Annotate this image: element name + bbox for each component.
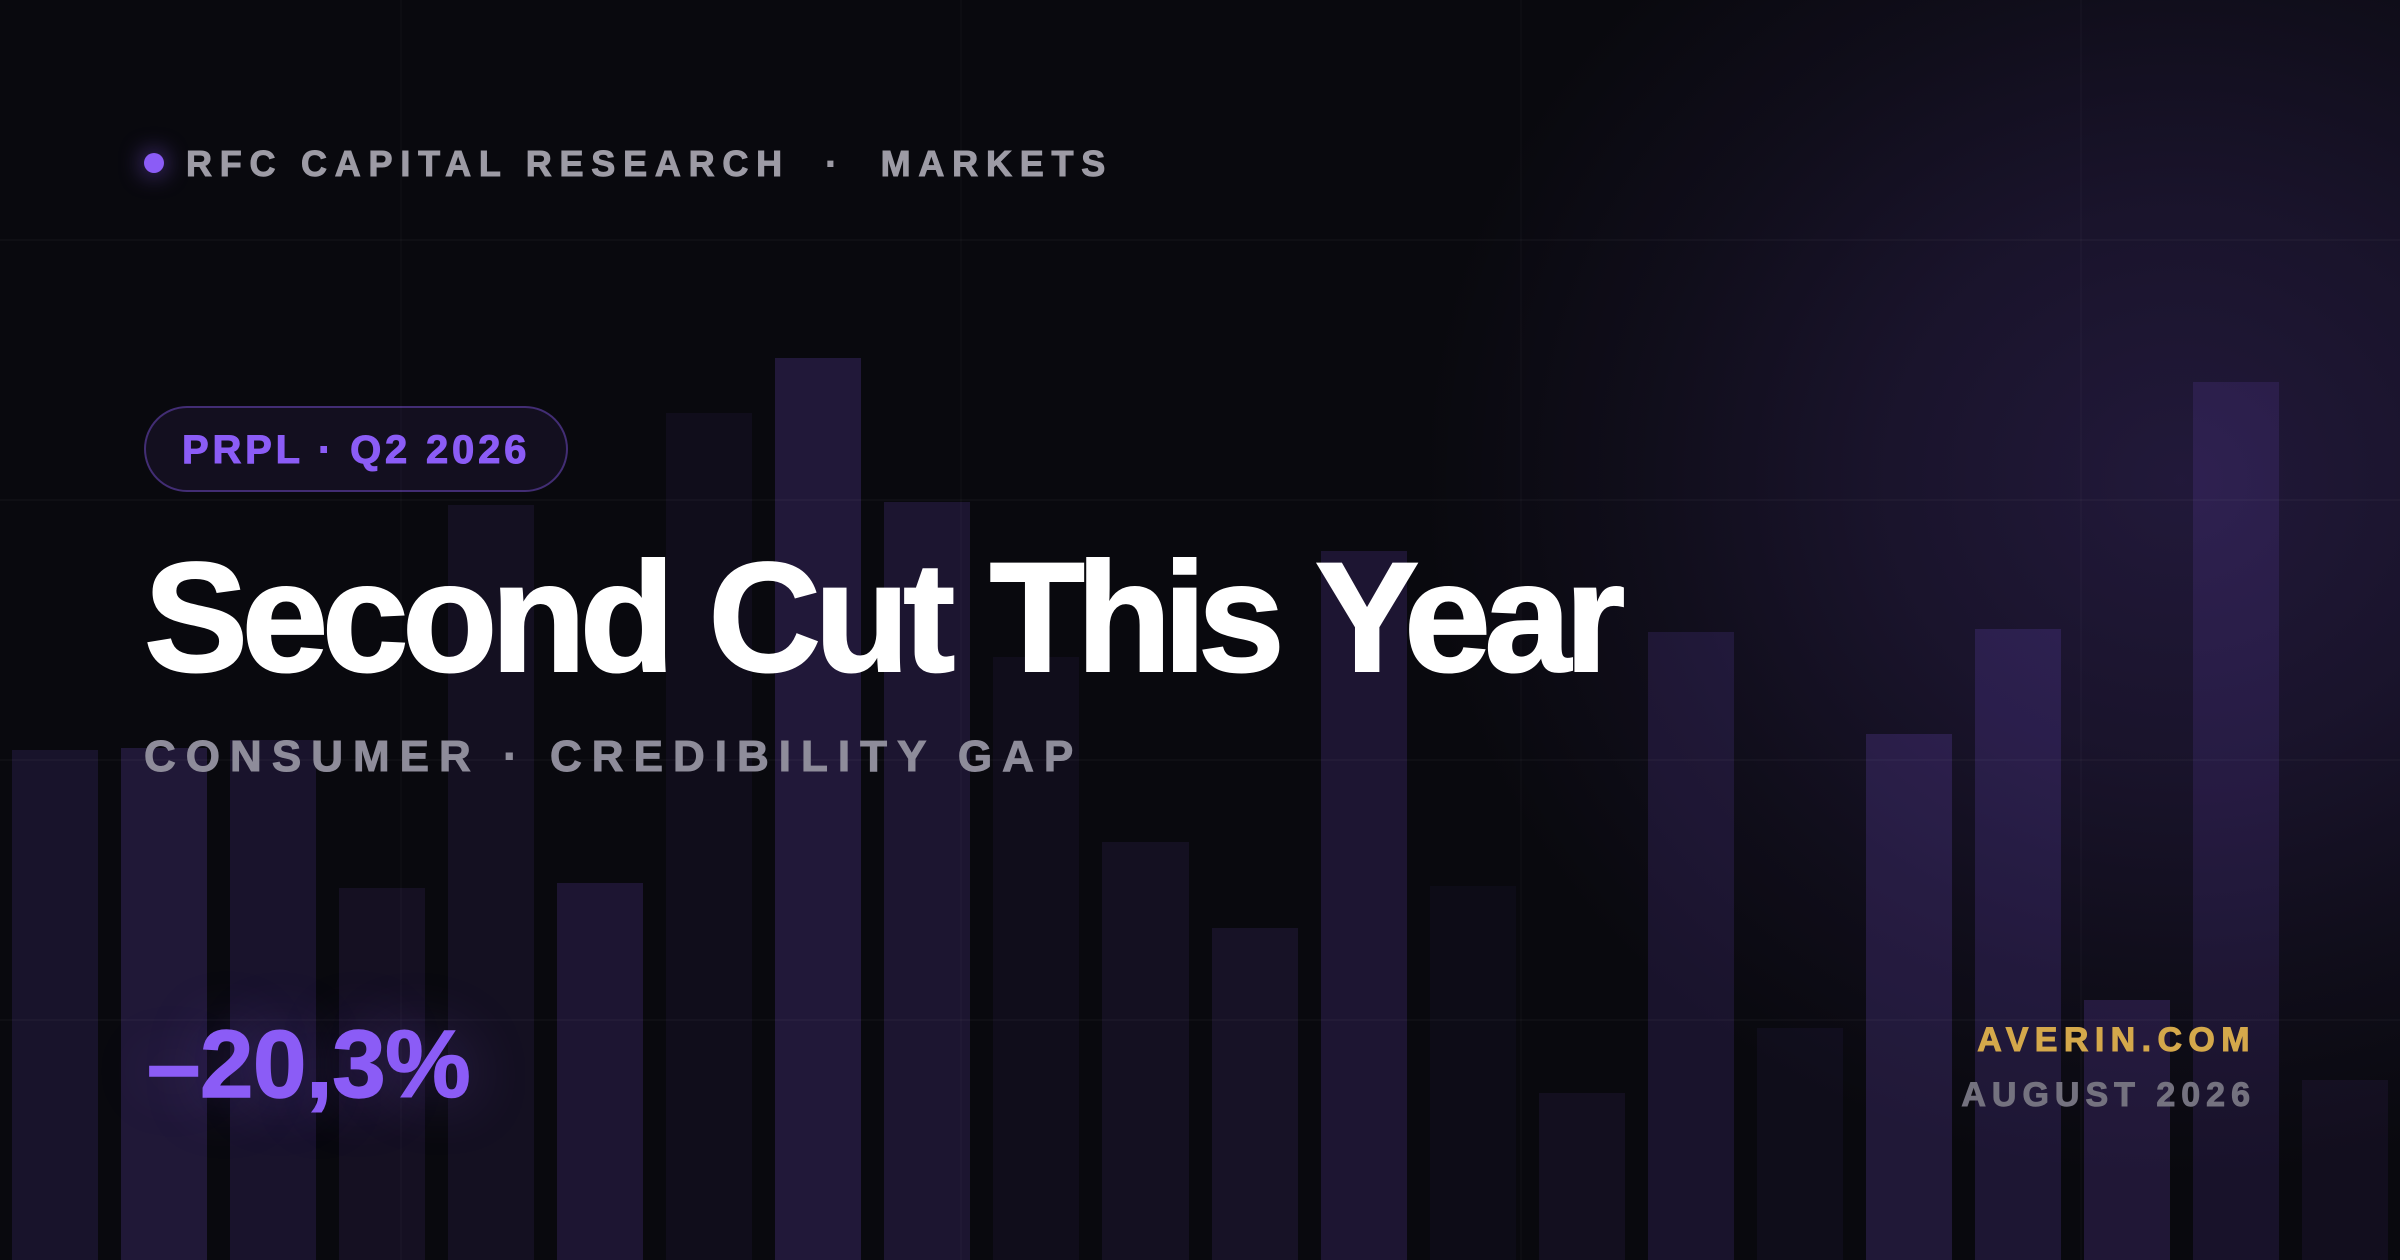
key figure: –20,3% [147,1011,470,1118]
subtitle: CONSUMER · CREDIBILITY GAP [144,732,1083,781]
publication date: AUGUST 2026 [1961,1076,2256,1114]
icon: status dot [144,153,164,173]
ticker label: PRPL · Q2 2026 [182,428,530,472]
eyebrow: publisher and section: RFC CAPITAL RESEARCH · MARKETS [186,143,1113,184]
title: Second Cut This Year [144,531,1619,705]
source site: AVERIN.COM [1977,1021,2256,1059]
ticker pill [144,406,568,492]
